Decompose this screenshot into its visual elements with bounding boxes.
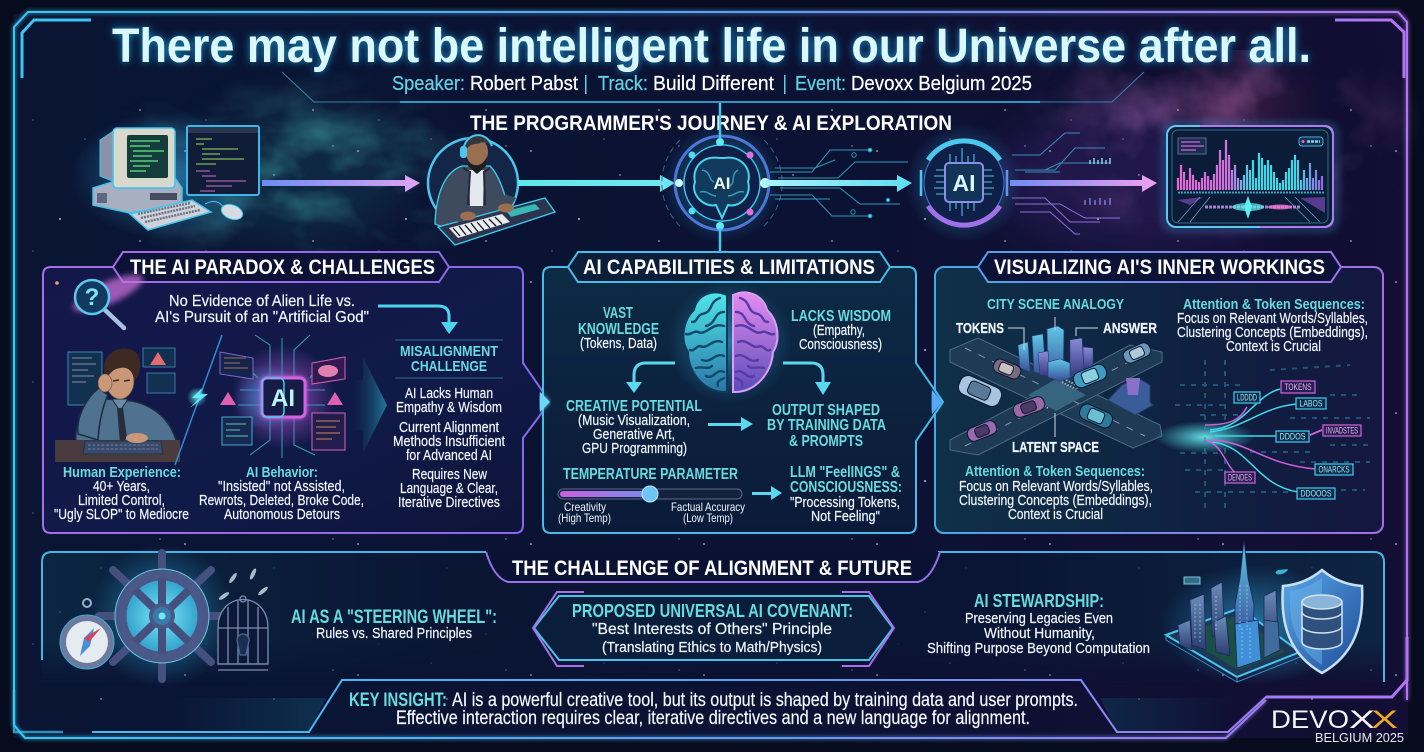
text: no evidence of alien life [155, 293, 369, 326]
text: vast knowledge: (Tokens, Data) [580, 336, 657, 352]
towers [1178, 540, 1280, 668]
text: LLM feelings: LLM "FeelINGS" & [790, 464, 900, 481]
callout: proposed universal AI covenant [533, 592, 894, 666]
subtitle: speaker, track, event: Speaker: [392, 73, 465, 95]
text: LLM feelings: "Processing Tokens, [790, 495, 900, 511]
text: AI stewardship: Preserving Legacies Even [965, 611, 1113, 627]
heading: alignment: THE CHALLENGE OF ALIGNMENT & FUTURE [512, 557, 912, 580]
illustration: AI chip with code windows: AI [271, 385, 295, 412]
labels: city analogy: ANSWER [1103, 321, 1157, 337]
text: misalignment challenge [393, 340, 505, 511]
callout: proposed universal AI covenant: "Best Interests of Others" Principle [592, 621, 832, 638]
text: misalignment challenge: Requires New [412, 467, 487, 483]
arrow: musician to brain [518, 175, 675, 192]
callout: key insight: Effective interaction requires clear, iterative directives and a new language for alignment. [396, 708, 1030, 729]
circuit traces: data stream [1012, 133, 1120, 234]
subtitle: speaker, track, event: Devoxx Belgium 2025 [851, 73, 1032, 95]
text: creative potential: CREATIVE POTENTIAL [566, 398, 702, 415]
text: misalignment challenge: MISALIGNMENT [400, 343, 498, 360]
token boxes: ONARCKS [1318, 464, 1350, 474]
labels: city analogy: LATENT SPACE [1012, 440, 1099, 456]
text: AI stewardship: AI STEWARDSHIP: [974, 591, 1104, 611]
icon: AI brain circle [662, 103, 782, 252]
feathers [218, 568, 269, 601]
text: AI behavior [199, 464, 364, 523]
icon: AI brain circle: AI [714, 174, 730, 193]
subtitle: speaker, track, event: Track: [598, 73, 648, 95]
text: AI stewardship [927, 591, 1150, 657]
arrow: big translucent [353, 357, 387, 453]
token boxes: INVADSTES [1326, 426, 1358, 436]
subtitle: speaker, track, event [392, 73, 1032, 95]
text: city scene analogy: CITY SCENE ANALOGY [987, 296, 1124, 313]
callout: proposed universal AI covenant: PROPOSED UNIVERSAL AI COVENANT: [572, 601, 853, 621]
text: output shaped [767, 402, 886, 450]
logo: Devoxx Belgium 2025: X [1349, 706, 1375, 734]
cars [956, 341, 1153, 443]
text: attention and token sequences, right: Context is Crucial [1226, 339, 1321, 355]
panel: visualizing AI's inner workings [935, 252, 1383, 533]
text: output shaped: OUTPUT SHAPED [772, 402, 880, 419]
arrow: slider to LLM [752, 486, 782, 500]
panel: the AI paradox and challenges [43, 252, 550, 533]
callout: key insight: KEY INSIGHT: [349, 690, 447, 711]
text: misalignment challenge: AI Lacks Human [405, 386, 493, 402]
token boxes: DENDES [1228, 472, 1252, 482]
text: attention and token sequences, left: Focus on Relevant Words/Syllables, [959, 479, 1153, 495]
text: temperature parameter: TEMPERATURE PARAMETER [563, 466, 738, 483]
text: lacks wisdom: Consciousness) [799, 337, 882, 353]
text: creative potential: (Music Visualization, [578, 413, 690, 429]
connector glow right [932, 390, 942, 414]
subtitle: speaker, track, event: Build Different [653, 73, 774, 95]
text: misalignment challenge: Language & Clear, [400, 481, 498, 497]
heading: capabilities [568, 252, 890, 282]
heading: inner workings [978, 252, 1341, 282]
illustration: frustrated programmer [55, 348, 180, 462]
text: misalignment challenge: Empathy & Wisdom [396, 400, 502, 416]
buildings [1018, 326, 1093, 381]
logo: Devoxx Belgium 2025: X [1371, 706, 1399, 734]
arrow: to misalignment [378, 306, 449, 326]
text: attention and token sequences, right [1177, 296, 1368, 355]
subtitle: speaker, track, event: Robert Pabst [470, 73, 578, 95]
text: steering wheel [291, 607, 497, 642]
text: human experience: Human Experience: [63, 464, 181, 481]
callout: key insight [92, 680, 1392, 732]
heading: capabilities: AI CAPABILITIES & LIMITATIONS [583, 256, 875, 279]
text: attention and token sequences, right: Focus on Relevant Words/Syllables, [1177, 311, 1368, 327]
heading: programmer's journey: THE PROGRAMMER'S JOURNEY & AI EXPLORATION [470, 112, 952, 135]
labels: slider: Factual Accuracy [671, 500, 745, 514]
icon: ship wheel, compass and birdcage [60, 544, 269, 688]
slider: temperature [558, 486, 742, 502]
callout lines [1008, 328, 1098, 437]
text: human experience: Limited Control, [78, 493, 165, 509]
arrows: from brain [626, 363, 831, 395]
callout: key insight: AI is a powerful creative tool, but its output is shaped by training data and user prompts. [452, 690, 1078, 711]
logo: Devoxx Belgium 2025: DEVO [1271, 706, 1349, 734]
token boxes: LDDDD [1237, 392, 1257, 402]
logo: Devoxx Belgium 2025 [1271, 706, 1404, 745]
text: LLM feelings: CONSCIOUSNESS: [790, 479, 902, 496]
labels: slider: Creativity [564, 500, 606, 514]
text: AI stewardship: Without Humanity, [984, 626, 1095, 642]
labels: slider: (Low Temp) [683, 511, 733, 525]
text: attention and token sequences, left: Context is Crucial [1008, 507, 1103, 523]
text: LLM feelings: Not Feeling" [811, 509, 880, 525]
text: human experience: 40+ Years, [93, 479, 150, 495]
text: no evidence of alien life: No Evidence of Alien Life vs. [169, 293, 355, 310]
text: LLM feelings [790, 464, 902, 525]
chart: token flow [1155, 360, 1370, 510]
text: vast knowledge: KNOWLEDGE [578, 321, 659, 338]
text: steering wheel: AI AS A "STEERING WHEEL": [291, 607, 497, 628]
text: attention and token sequences, left: Attention & Token Sequences: [965, 463, 1145, 480]
text: AI behavior: "Insisted" not Assisted, [218, 479, 345, 495]
text: misalignment challenge: Iterative Directives [398, 495, 500, 511]
text: misalignment challenge: for Advanced AI [406, 448, 492, 464]
compass [60, 599, 114, 669]
token boxes: TOKENS [1284, 382, 1312, 392]
text: attention and token sequences, right: Attention & Token Sequences: [1183, 296, 1365, 313]
text: attention and token sequences, left: Clustering Concepts (Embeddings), [959, 493, 1152, 509]
text: output shaped: BY TRAINING DATA [767, 417, 886, 434]
arrow: brain to chip [762, 175, 912, 192]
icon: AI chip circle: AI [952, 170, 976, 196]
callout: proposed universal AI covenant: (Translating Ethics to Math/Physics) [602, 639, 822, 656]
labels: slider: (High Temp) [558, 511, 611, 525]
heading: AI paradox: THE AI PARADOX & CHALLENGES [130, 256, 435, 279]
birdcage [218, 596, 268, 670]
text: steering wheel: Rules vs. Shared Principles [316, 626, 472, 642]
subtitle: speaker, track, event: Event: [795, 73, 846, 95]
text: AI stewardship: Shifting Purpose Beyond Computation [927, 641, 1150, 657]
labels: city analogy [956, 321, 1157, 456]
text: lacks wisdom [791, 308, 891, 353]
shield [1282, 570, 1362, 673]
icon: magnifier over galaxy: ? [85, 284, 99, 311]
icon: two-tone brain [668, 280, 792, 404]
text: human experience: "Ugly SLOP" to Mediocre [54, 507, 189, 523]
arrow head [441, 322, 458, 334]
heading: inner workings: VISUALIZING AI'S INNER WORKINGS [994, 256, 1325, 279]
divider: lightning [175, 335, 222, 465]
text: attention and token sequences, right: Clustering Concepts (Embeddings), [1177, 325, 1368, 341]
icon: musician at keyboard [428, 134, 555, 245]
text: output shaped: & PROMPTS [789, 433, 863, 450]
logo: Devoxx Belgium 2025: BELGIUM 2025 [1315, 730, 1404, 745]
text: misalignment challenge: Methods Insufficient [393, 434, 505, 450]
text: AI behavior: AI Behavior: [246, 464, 318, 481]
panel: AI capabilities and limitations [540, 252, 943, 533]
icon: AI chip circle [906, 123, 1022, 243]
circuit traces [770, 148, 908, 218]
token boxes: LABOS [1300, 398, 1322, 408]
heading: AI paradox [113, 252, 449, 282]
text: human experience [54, 464, 189, 523]
text: vast knowledge: VAST [603, 305, 633, 322]
icon: magnifier over galaxy [55, 267, 147, 328]
illustration: AI chip with code windows [220, 335, 345, 458]
token boxes: DDOOOS [1300, 488, 1332, 498]
text: creative potential: Generative Art, [593, 427, 675, 443]
connector glows [540, 392, 550, 412]
title: There may not be intelligent life in our Universe after all. [112, 20, 1311, 73]
small purple building [1108, 378, 1153, 415]
ship wheel [99, 553, 225, 679]
text: creative potential [566, 398, 702, 457]
panel: the challenge of alignment and future [42, 540, 1384, 688]
icon: city and data shield [1160, 540, 1362, 685]
heading: alignment [486, 552, 940, 582]
token boxes: DDDOS [1280, 432, 1306, 442]
illustration: city intersection [950, 317, 1162, 455]
text: creative potential: GPU Programming) [582, 441, 687, 457]
text: misalignment challenge: CHALLENGE [411, 358, 487, 375]
icon: music visualiser screen [1160, 120, 1340, 234]
text: attention and token sequences, left [959, 463, 1153, 523]
icon: retro computer and code window [70, 110, 270, 240]
journey row [70, 103, 1340, 252]
text: vast knowledge [578, 305, 659, 352]
text: lacks wisdom: LACKS WISDOM [791, 308, 891, 325]
arrow: creative to output [708, 417, 753, 431]
text: AI behavior: Autonomous Detours [224, 507, 340, 523]
token boxes [1225, 381, 1361, 499]
labels: city analogy: TOKENS [956, 321, 1004, 337]
labels: slider [558, 500, 745, 525]
text: no evidence of alien life: AI's Pursuit of an "Artificial God" [155, 309, 369, 326]
arrow: chip to visualiser [1010, 175, 1157, 192]
arrow: computer to musician [262, 175, 420, 192]
text: lacks wisdom: (Empathy, [813, 323, 865, 339]
text: AI behavior: Rewrots, Deleted, Broke Code, [199, 493, 364, 509]
text: misalignment challenge: Current Alignment [399, 420, 499, 436]
